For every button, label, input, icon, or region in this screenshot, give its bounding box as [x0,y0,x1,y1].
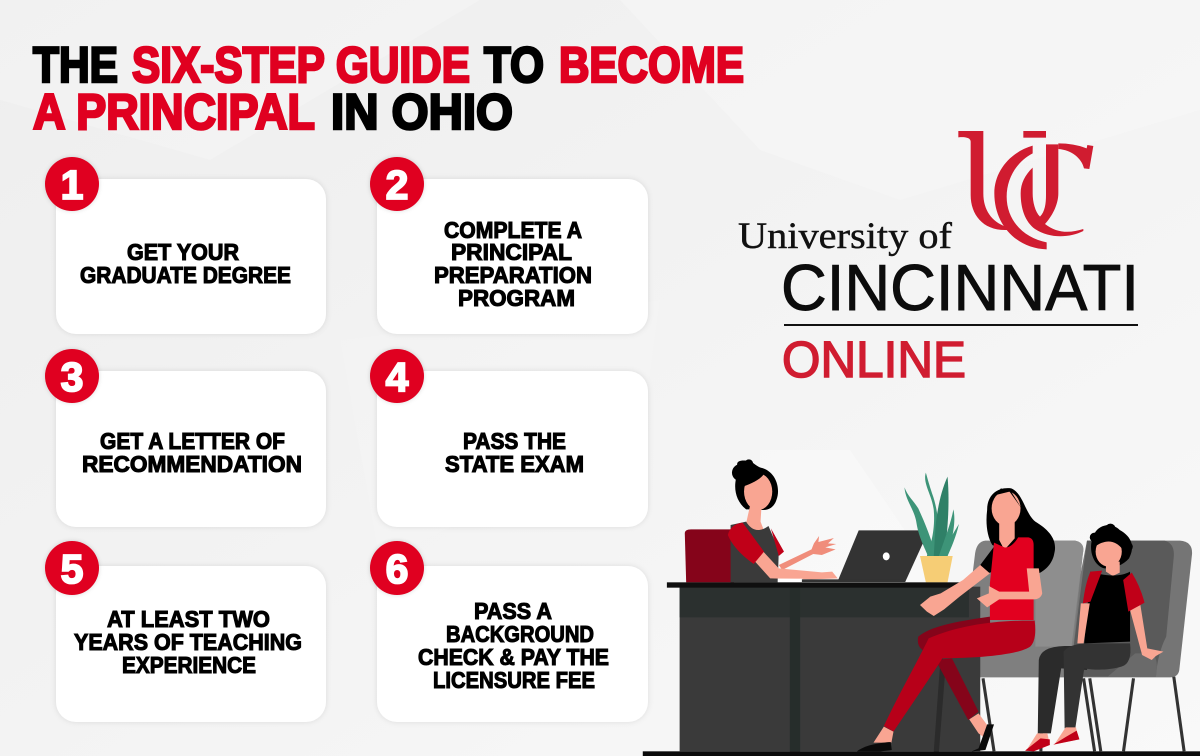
step 1 card [45,157,326,334]
logo: University of Cincinnati Online [738,131,1139,388]
step 5 card: YEARS OF TEACHING [74,629,302,655]
step 2 card [370,157,648,334]
step 1 card: GRADUATE DEGREE [80,262,291,288]
step 3 card: RECOMMENDATION [82,451,302,477]
desk top [667,582,963,588]
step 1 card: GET YOUR [127,239,239,265]
laptop [802,530,927,582]
plant [904,473,959,582]
step 6 card: BACKGROUND [446,621,594,647]
floor [643,751,1200,756]
step 5 card: AT LEAST TWO [107,606,270,632]
illustration: principal meeting at desk [643,459,1200,756]
step 2 card: 2 [386,162,408,208]
step 2 card: PROGRAM [458,285,575,311]
CINCINNATI: CINCINNATI [781,251,1139,324]
chair: back chair [1066,541,1192,751]
step 4 card: PASS THE [463,428,566,454]
child [1025,524,1163,751]
step 6 card: 6 [386,546,408,592]
woman [857,488,1055,751]
icon: UC monogram [958,131,1093,249]
desk [680,587,980,751]
title: THE [33,37,118,93]
title: TO [484,37,544,93]
step 6 card: LICENSURE FEE [433,667,595,693]
ONLINE: ONLINE [782,331,966,388]
step 6 card: CHECK & PAY THE [418,644,609,670]
step 5 card: EXPERIENCE [122,652,256,678]
step 6 card: PASS A [474,598,552,624]
title: SIX-STEP GUIDE [132,37,470,93]
title: IN OHIO [331,84,513,140]
step 2 card: PRINCIPAL [451,239,572,265]
step 4 card [370,349,648,527]
step 6 card [370,541,648,722]
step 4 card: 4 [386,354,409,400]
title [33,37,744,140]
step 1 card: 1 [61,162,83,208]
chair: front chair [949,541,1095,751]
step 3 card: 3 [61,354,83,400]
step 5 card [45,541,326,722]
title: A PRINCIPAL [33,84,315,140]
teacher chair [685,529,734,582]
title: BECOME [559,37,744,93]
step 2 card: PREPARATION [434,262,592,288]
step 3 card [45,349,326,527]
teacher [728,459,838,582]
step 4 card: STATE EXAM [445,451,584,477]
step 3 card: GET A LETTER OF [100,428,285,454]
step 2 card: COMPLETE A [444,217,582,243]
step 5 card: 5 [61,546,83,592]
University of: University of [738,216,953,257]
